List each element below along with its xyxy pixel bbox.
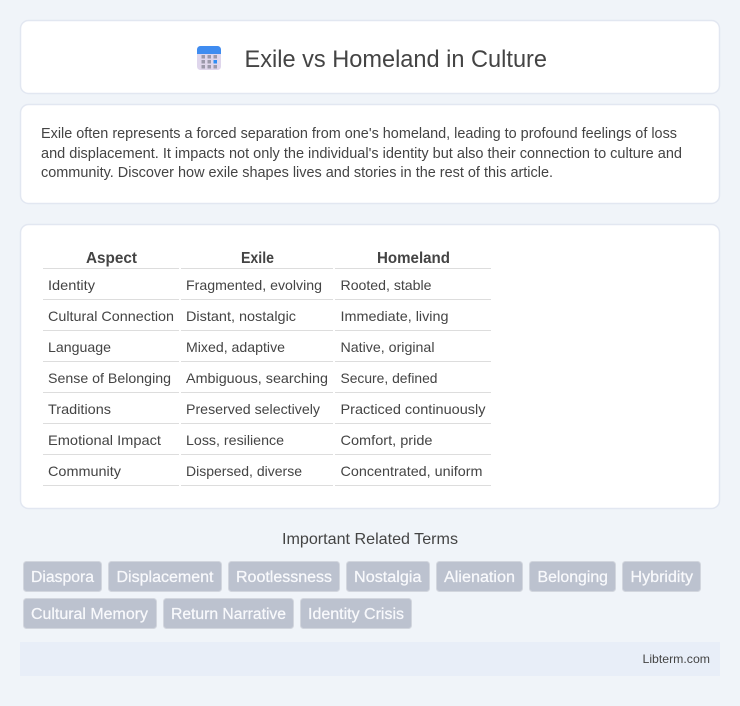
row: traditions: Traditions [48, 401, 111, 417]
row: cultural connection [48, 308, 448, 324]
footer credit: Libterm.com [642, 652, 710, 666]
row: cultural connection: Immediate, living [340, 308, 448, 324]
row: sense of belonging: Secure, defined [340, 370, 438, 386]
related term tags [24, 562, 700, 628]
intro text: Exile often represents a forced separation from one's homeland, leading to profound feelings of loss [41, 126, 677, 142]
row: traditions: Preserved selectively [186, 401, 320, 417]
row: community: Concentrated, uniform [340, 463, 482, 479]
tag: Cultural Memory [24, 598, 156, 628]
table header: Aspect [86, 250, 137, 267]
row: cultural connection: Cultural Connection [48, 308, 174, 324]
tag: Nostalgia: Nostalgia [354, 569, 422, 586]
row: identity: Rooted, stable [340, 277, 432, 293]
tag: Hybridity [622, 562, 700, 592]
row: sense of belonging [48, 370, 438, 386]
tag: Belonging [530, 562, 616, 592]
panel: comparison table [20, 224, 720, 508]
tag: Return Narrative [164, 598, 294, 628]
row: emotional impact [48, 432, 433, 448]
tag: Displacement: Displacement [116, 569, 214, 586]
footer [20, 642, 720, 676]
tag: Diaspora [24, 562, 102, 592]
tag: Rootlessness [228, 562, 340, 592]
tag: Displacement [108, 562, 222, 592]
tag: Return Narrative: Return Narrative [171, 606, 286, 623]
row: sense of belonging: Ambiguous, searching [186, 370, 328, 386]
row: language: Mixed, adaptive [186, 339, 285, 355]
table header: Exile [241, 250, 274, 267]
tag: Nostalgia [346, 562, 430, 592]
tag: Identity Crisis: Identity Crisis [308, 606, 404, 623]
row: language: Native, original [340, 339, 434, 355]
table header: Homeland [377, 250, 450, 267]
row: language: Language [48, 339, 111, 355]
row: language [48, 339, 434, 355]
tag: Rootlessness: Rootlessness [236, 569, 332, 586]
icon: calendar [197, 46, 221, 70]
tag: Alienation: Alienation [444, 569, 515, 586]
tag: Alienation [436, 562, 522, 592]
row: community: Dispersed, diverse [186, 463, 302, 479]
row: emotional impact: Loss, resilience [186, 432, 284, 448]
tag: Identity Crisis [300, 598, 412, 628]
row: community: Community [48, 463, 121, 479]
intro text: community. Discover how exile shapes lives and stories in the rest of this article. [41, 165, 553, 181]
title: Exile vs Homeland in Culture [244, 46, 547, 73]
row: identity [48, 277, 432, 293]
row: community [48, 463, 482, 479]
tag: Diaspora: Diaspora [31, 569, 94, 586]
panel: introduction [20, 104, 720, 204]
row: identity: Fragmented, evolving [186, 277, 322, 293]
header panel [20, 20, 720, 94]
row: cultural connection: Distant, nostalgic [186, 308, 296, 324]
tag: Cultural Memory: Cultural Memory [31, 606, 148, 623]
tag: Belonging: Belonging [538, 569, 608, 586]
intro text: and displacement. It impacts not only the individual's identity but also their connection to culture and [41, 146, 682, 162]
table header [86, 250, 450, 267]
heading: related terms: Important Related Terms [282, 531, 458, 548]
row: traditions: Practiced continuously [340, 401, 486, 417]
row: sense of belonging: Sense of Belonging [48, 370, 171, 386]
row: identity: Identity [48, 277, 95, 293]
row: traditions [48, 401, 486, 417]
tag: Hybridity: Hybridity [630, 569, 693, 586]
row: emotional impact: Emotional Impact [48, 432, 161, 448]
row: emotional impact: Comfort, pride [340, 432, 433, 448]
intro text [41, 126, 682, 181]
